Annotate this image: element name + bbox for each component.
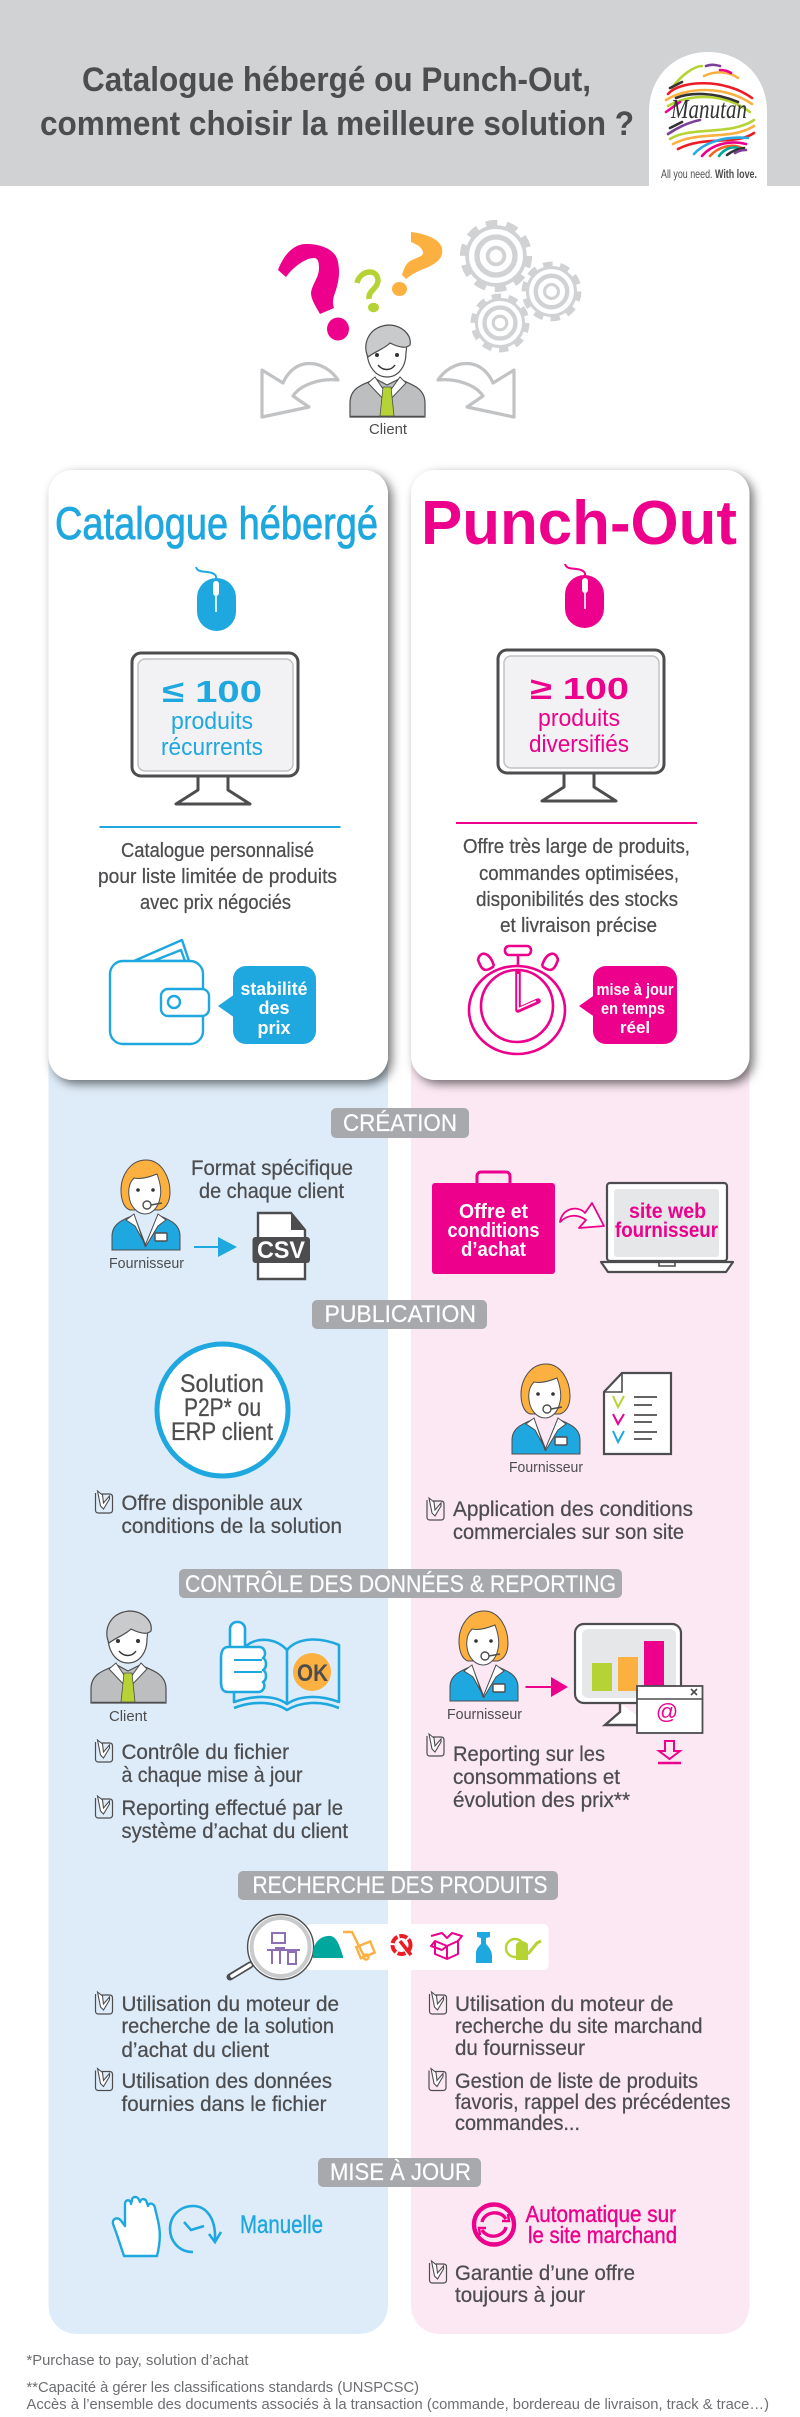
heading: punch-out: Punch-Out <box>421 489 737 558</box>
icon: pink question mark <box>278 244 349 340</box>
bullet: moteur du site marchand <box>430 1992 702 2060</box>
icon: green question mark <box>357 272 379 312</box>
icon: hand <box>113 2197 160 2256</box>
label: fournisseur: Fournisseur <box>509 1460 583 1476</box>
icon: csv file <box>252 1213 310 1279</box>
text: punch-out description: et livraison précise <box>500 915 657 937</box>
icon: watering can <box>506 1939 541 1960</box>
icon: fournisseur <box>450 1611 518 1701</box>
icon: wrench gear <box>392 1936 411 1955</box>
icon: pink mouse <box>565 564 604 628</box>
callout: mise à jour en temps réel: réel <box>620 1018 650 1037</box>
icon: checklist document <box>604 1373 671 1454</box>
callout: solution p2p: P2P* ou <box>184 1394 261 1422</box>
bullet: reporting consommations: évolution des prix** <box>453 1789 630 1812</box>
text: automatique sur le site marchand <box>526 2201 677 2248</box>
text: format spécifique <box>191 1157 353 1203</box>
title: comment choisir la meilleure solution ? <box>40 105 634 143</box>
text: automatique sur le site marchand: le site marchand <box>528 2222 677 2248</box>
bullet: reporting consommations <box>427 1734 630 1812</box>
icon: magnifier with desk <box>230 1914 314 1980</box>
text: catalogue description: pour liste limitée de produits <box>98 866 337 888</box>
footnotes: *Purchase to pay, solution d’achat <box>26 2352 249 2369</box>
icon: wallet <box>110 940 209 1044</box>
text: punch-out description: disponibilités des stocks <box>476 889 678 911</box>
text: punch-out description: commandes optimisées, <box>479 863 679 885</box>
icon: gears <box>463 223 579 350</box>
bullet: liste de produits favoris: favoris, rappel des précédentes <box>455 2091 730 2114</box>
icon: monitor with count: ≥ 100 <box>530 671 629 706</box>
bullet: moteur de recherche catalogue: Utilisation du moteur de <box>122 1993 339 2016</box>
heading: catalogue hébergé: Catalogue hébergé <box>55 498 378 549</box>
callout: stabilité des prix: des <box>258 998 290 1018</box>
icon: client <box>350 325 425 417</box>
bullet: données fournies: Utilisation des données <box>122 2070 332 2093</box>
text: manuelle: Manuelle <box>240 2211 323 2239</box>
bullet: reporting effectué: système d’achat du client <box>122 1820 348 1843</box>
bullet: application des conditions <box>427 1498 693 1544</box>
bullet: reporting consommations: consommations et <box>453 1766 620 1789</box>
bullet: garantie d'une offre <box>430 2261 635 2307</box>
bullet: liste de produits favoris: commandes... <box>455 2112 580 2135</box>
icon: download <box>658 1741 681 1763</box>
bullet: liste de produits favoris: Gestion de liste de produits <box>455 2070 698 2093</box>
bullet: offre disponible <box>96 1491 342 1538</box>
icon: automatic sync <box>474 2204 514 2244</box>
bullet: application des conditions: Application des conditions <box>453 1498 693 1521</box>
icon: monitor with count <box>132 653 298 804</box>
text: catalogue description <box>98 840 337 914</box>
title <box>40 61 634 143</box>
icon: fournisseur <box>112 1160 180 1250</box>
icon: helmet <box>313 1936 343 1958</box>
icon: csv file: CSV <box>257 1237 305 1264</box>
icon: briefcase with offer: Offre et <box>459 1201 528 1223</box>
callout: solution p2p <box>157 1344 288 1476</box>
product search strip <box>230 1914 548 1980</box>
heading: publication: PUBLICATION <box>324 1301 476 1328</box>
icon: monitor with count: ≤ 100 <box>162 674 262 709</box>
panel: punch-out card <box>411 470 750 1080</box>
icon: monitor with count <box>498 650 664 801</box>
icon: fournisseur <box>512 1364 580 1454</box>
bullet: offre disponible: Offre disponible aux <box>122 1492 303 1515</box>
callout: mise à jour en temps réel: en temps <box>601 999 665 1018</box>
arrow: to website <box>560 1203 604 1228</box>
bullet: liste de produits favoris <box>429 2068 730 2135</box>
label: client: Client <box>109 1709 147 1725</box>
icon: monitor with count: produits <box>171 708 253 735</box>
icon: stopwatch <box>469 946 565 1054</box>
icon: monitor with count: diversifiés <box>529 731 629 758</box>
bullet: contrôle du fichier: à chaque mise à jour <box>122 1764 303 1787</box>
icon: laptop site web: fournisseur <box>615 1219 718 1242</box>
bullet: contrôle du fichier: Contrôle du fichier <box>122 1741 289 1764</box>
text: catalogue description: avec prix négociés <box>140 892 291 914</box>
icon: blue mouse <box>196 567 236 631</box>
heading: mise à jour: MISE À JOUR <box>330 2159 471 2186</box>
icon: briefcase with offer <box>432 1172 555 1274</box>
bullet: reporting effectué <box>96 1796 348 1843</box>
arrow: to csv <box>194 1237 237 1257</box>
icon: client <box>91 1611 166 1703</box>
callout: stabilité des prix: prix <box>257 1018 291 1038</box>
panel: catalogue hébergé card <box>48 470 388 1080</box>
bullet: moteur de recherche catalogue <box>96 1992 339 2062</box>
icon: monitor with bar chart and mail <box>575 1624 702 1733</box>
label: fournisseur: Fournisseur <box>109 1256 184 1272</box>
icon: thumbs up with book: OK <box>297 1660 329 1687</box>
icon: spray bottle <box>476 1932 492 1963</box>
icon: laptop site web <box>601 1183 733 1272</box>
icon: orange question mark <box>392 232 442 296</box>
icon: briefcase with offer: conditions <box>448 1220 540 1242</box>
label: fournisseur: Fournisseur <box>447 1707 522 1723</box>
heading: contrôle des données: CONTRÔLE DES DONNÉES & REPORTING <box>185 1570 616 1598</box>
icon: clock with arrow <box>170 2206 221 2252</box>
bullet: moteur de recherche catalogue: d’achat du client <box>122 2039 269 2062</box>
text: automatique sur le site marchand: Automatique sur <box>526 2201 676 2227</box>
icon: monitor with bar chart and mail: @ <box>656 1699 678 1724</box>
callout: stabilité des prix <box>218 966 316 1044</box>
bullet: moteur du site marchand: Utilisation du moteur de <box>455 1993 674 2016</box>
icon: thumbs up with book <box>221 1622 339 1710</box>
bullet: données fournies <box>96 2068 332 2116</box>
logo: Manutan: Manutan <box>670 94 747 124</box>
bullet: garantie d'une offre: Garantie d’une offre <box>455 2262 635 2285</box>
bullet: reporting effectué: Reporting effectué par le <box>122 1797 343 1820</box>
panel background: catalogue column <box>48 1040 388 2334</box>
panel background: punch-out column <box>411 1040 750 2334</box>
icon: left curved arrow <box>262 363 338 417</box>
bullet: moteur du site marchand: du fournisseur <box>455 2037 585 2060</box>
icon: briefcase with offer: d’achat <box>461 1239 526 1261</box>
icon: monitor with count: produits <box>538 705 620 732</box>
callout: mise à jour en temps réel <box>579 966 677 1044</box>
bullet: moteur du site marchand: recherche du site marchand <box>455 2015 702 2038</box>
callout: mise à jour en temps réel: mise à jour <box>596 980 674 999</box>
callout: solution p2p: Solution <box>180 1370 264 1398</box>
callout: stabilité des prix: stabilité <box>240 979 308 999</box>
header band <box>0 0 800 186</box>
heading: création: CRÉATION <box>343 1110 457 1137</box>
bullet: contrôle du fichier <box>96 1740 303 1787</box>
label: client: Client <box>369 422 407 438</box>
text: catalogue description: Catalogue personnalisé <box>121 840 314 862</box>
bullet: application des conditions: commerciales sur son site <box>453 1521 684 1544</box>
icon: trolley <box>343 1932 375 1960</box>
icon: laptop site web: site web <box>629 1200 706 1223</box>
callout: solution p2p: ERP client <box>171 1418 273 1446</box>
icon: box <box>431 1933 462 1959</box>
text: punch-out description: Offre très large de produits, <box>463 836 690 858</box>
icon: right curved arrow <box>438 363 514 417</box>
text: format spécifique: Format spécifique <box>191 1157 353 1180</box>
bullet: données fournies: fournies dans le fichier <box>122 2093 326 2116</box>
heading: recherche des produits: RECHERCHE DES PRODUITS <box>252 1872 548 1899</box>
bullet: garantie d'une offre: toujours à jour <box>455 2284 585 2307</box>
icon: monitor with count: récurrents <box>161 734 263 761</box>
footnotes: **Capacité à gérer les classifications standards (UNSPCSC) <box>26 2379 419 2396</box>
text: format spécifique: de chaque client <box>199 1180 344 1203</box>
bullet: moteur de recherche catalogue: recherche de la solution <box>122 2015 334 2038</box>
bullet: offre disponible: conditions de la solution <box>122 1515 342 1538</box>
logo: Manutan <box>649 52 767 186</box>
text: punch-out description <box>463 836 690 937</box>
title: Catalogue hébergé ou Punch-Out, <box>82 61 591 99</box>
footnotes <box>26 2352 769 2413</box>
arrow: to monitor <box>526 1677 568 1697</box>
logo: Manutan: All you need. With love. <box>661 167 757 181</box>
footnotes: Accès à l’ensemble des documents associés à la transaction (commande, bordereau de livraison, track & trace…) <box>26 2396 769 2413</box>
bullet: reporting consommations: Reporting sur les <box>453 1743 605 1766</box>
